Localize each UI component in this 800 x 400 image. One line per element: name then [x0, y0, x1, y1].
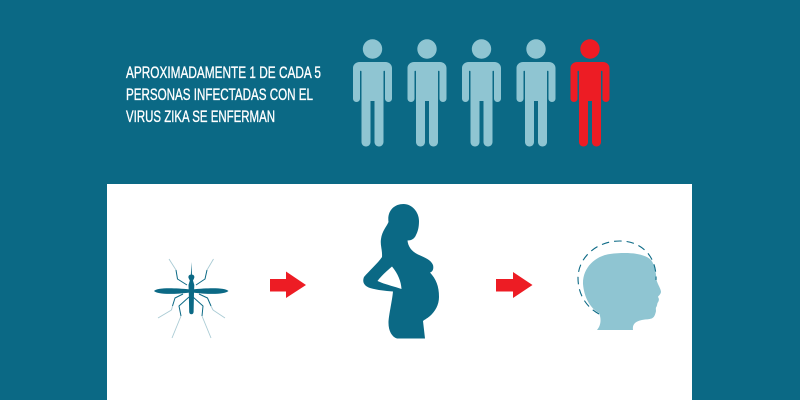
person 4 — [516, 39, 556, 146]
mosquito body — [188, 274, 194, 314]
headline text: PERSONAS INFECTADAS CON EL — [126, 86, 313, 104]
arrow 2 — [496, 272, 532, 298]
mosquito legs — [158, 259, 225, 338]
headline text: VIRUS ZIKA SE ENFERMAN — [126, 108, 275, 126]
icon: baby head with microcephaly outline — [578, 241, 661, 330]
person 2 — [408, 39, 446, 146]
pictogram: 1 of 5 people — [353, 39, 610, 146]
dashed normal head outline — [578, 241, 656, 314]
person 1 — [353, 39, 392, 146]
mosquito proboscis — [191, 262, 192, 276]
mosquito wings — [154, 288, 228, 294]
baby head profile — [583, 253, 661, 330]
arrow 1 — [270, 272, 306, 298]
icon: mosquito — [154, 259, 228, 338]
person 5: infected, red — [570, 39, 610, 146]
headline text: APROXIMADAMENTE 1 DE CADA 5 — [126, 64, 321, 82]
icon: pregnant woman silhouette — [363, 204, 439, 338]
white panel — [107, 184, 692, 400]
headline text — [126, 64, 321, 126]
person 3 — [462, 39, 501, 146]
